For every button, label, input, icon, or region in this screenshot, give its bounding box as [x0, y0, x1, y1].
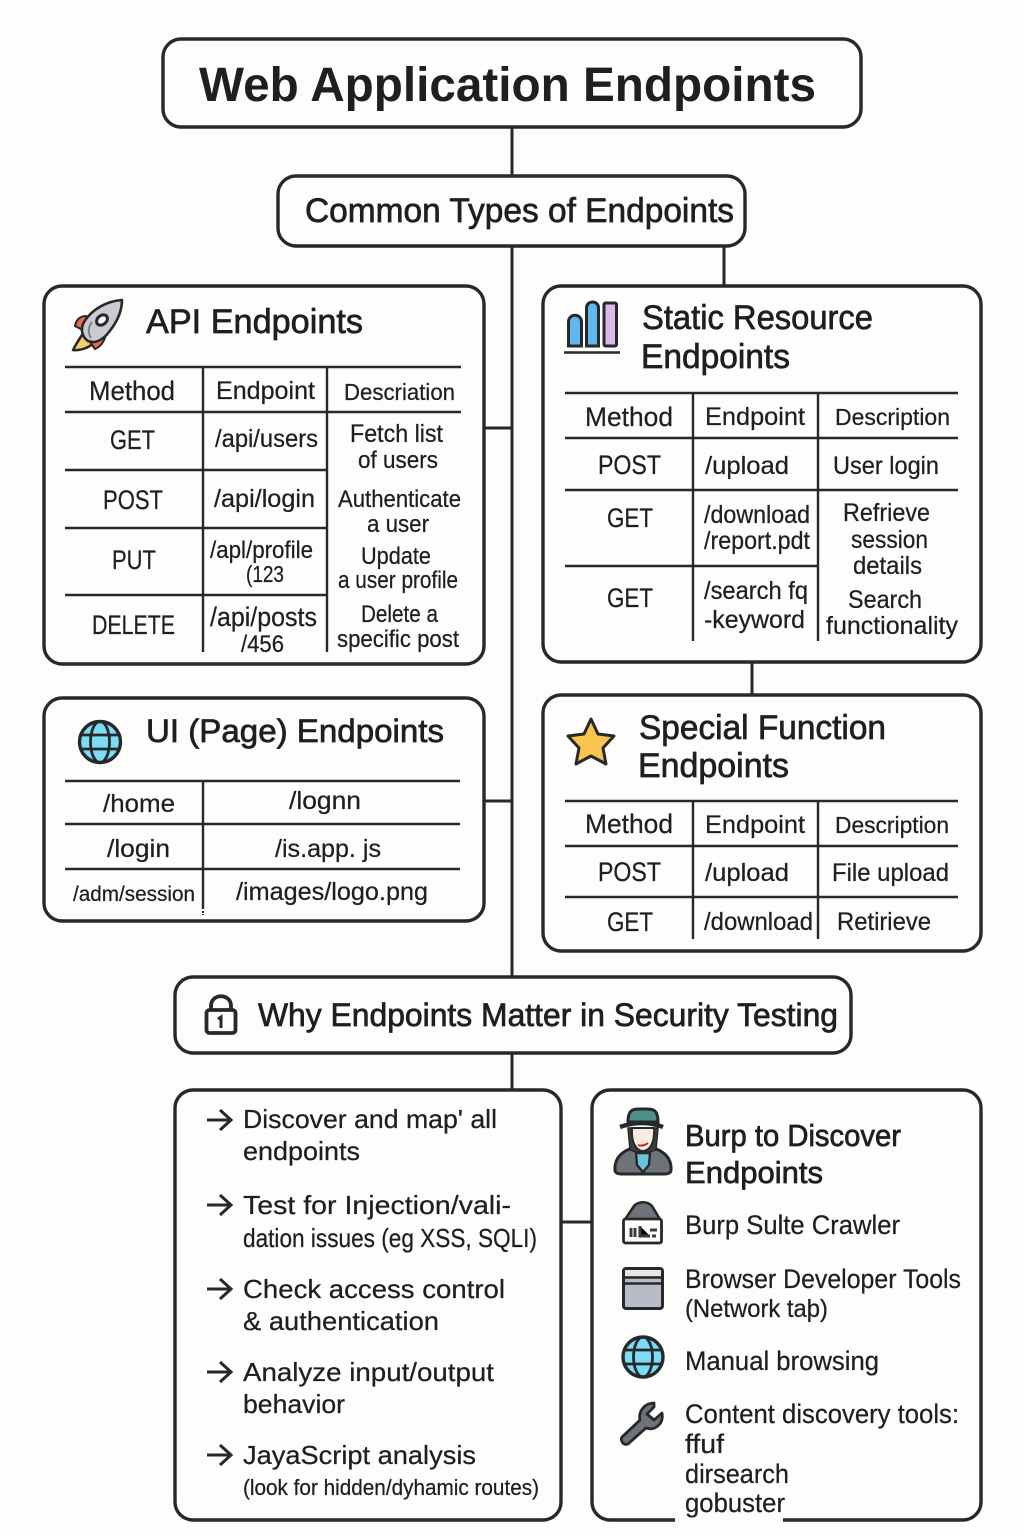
text: checklist items: dation issues (eg XSS, SQLI)	[243, 1223, 537, 1253]
text: API table: Method	[89, 376, 175, 406]
text: API table: /apl/profile	[210, 537, 313, 564]
text: special table: Endpoint	[705, 811, 805, 839]
text: API table: DELETE	[92, 610, 175, 640]
icon: star	[568, 719, 614, 764]
panel: API endpoints	[44, 286, 484, 664]
text: static table: details	[853, 552, 922, 580]
text: static table: /search fq	[704, 577, 808, 605]
text: API table	[89, 376, 461, 658]
text: API table: Endpoint	[216, 377, 315, 405]
panel: burp to discover endpoints: Browser Developer Tools	[685, 1264, 961, 1294]
text: API table: (123	[246, 561, 284, 587]
text: checklist items: Test for Injection/vali-	[243, 1190, 511, 1220]
text: API table: PUT	[112, 545, 156, 575]
text: UI table: /lognn	[289, 787, 361, 815]
text: API table: GET	[110, 425, 155, 455]
heading: common types of endpoints	[278, 176, 745, 246]
panel: burp to discover endpoints: Burp Sulte Crawler	[685, 1210, 900, 1240]
text: API table: a user profile	[338, 567, 458, 594]
text: checklist items: endpoints	[243, 1136, 360, 1166]
title: Web Application Endpoints	[199, 59, 816, 112]
text: API table: Fetch list	[350, 420, 443, 448]
text: checklist items: Analyze input/output	[243, 1357, 495, 1387]
icon: rocket	[73, 300, 122, 350]
panel: API endpoints: API Endpoints	[146, 303, 363, 341]
text: static table: POST	[598, 450, 661, 480]
panel: burp to discover endpoints: Content discovery tools:	[685, 1399, 959, 1429]
text: special table: /upload	[705, 859, 789, 887]
panel: static resource endpoints	[543, 286, 981, 662]
panel: UI page endpoints	[44, 698, 484, 921]
heading: why endpoints matter	[175, 977, 851, 1053]
panel: special function endpoints: Endpoints	[638, 747, 789, 785]
heading: why endpoints matter: Why Endpoints Matter in Security Testing	[258, 997, 838, 1033]
text: special table: File upload	[832, 859, 949, 887]
text: static table: User login	[833, 452, 939, 480]
text: special table: POST	[598, 857, 661, 887]
text: UI table	[73, 787, 428, 906]
text: API table: /api/posts	[210, 602, 317, 632]
text: special table: GET	[607, 907, 653, 937]
text: static table: functionality	[826, 612, 958, 640]
text: UI table: /is.app. js	[275, 835, 381, 863]
text: checklist items: (look for hidden/dyhamic routes)	[243, 1475, 539, 1500]
panel: burp to discover endpoints	[592, 1090, 981, 1524]
text: API table: Descriation	[344, 379, 455, 405]
icon: wrench	[621, 1403, 662, 1444]
text: checklist items: behavior	[243, 1389, 345, 1419]
text: API table: /api/login	[214, 485, 315, 513]
text: API table: Authenticate	[338, 486, 461, 513]
text: special table: Retirieve	[837, 908, 931, 936]
panel: burp to discover endpoints: Manual browsing	[685, 1346, 879, 1376]
text: static table: GET	[607, 503, 653, 533]
text: checklist items: JayaScript analysis	[243, 1440, 476, 1470]
panel: burp to discover endpoints: dirsearch	[685, 1459, 789, 1489]
text: API table: Update	[361, 543, 431, 570]
text: static table: GET	[607, 583, 653, 613]
text: static table: session	[851, 526, 928, 554]
text: API table: a user	[367, 511, 429, 538]
text: static table: Search	[848, 586, 922, 614]
panel: burp to discover endpoints: gobuster	[685, 1488, 785, 1518]
text: static table: -keyword	[704, 606, 805, 634]
text: static table: /report.pdt	[704, 527, 810, 555]
icon: hacker with hat	[615, 1109, 671, 1174]
text: API table: of users	[358, 447, 438, 474]
panel: burp to discover endpoints: Burp to Discover	[685, 1118, 901, 1153]
panel: burp to discover endpoints: (Network taþ)	[685, 1295, 828, 1323]
text: UI table: /adm/session	[73, 883, 195, 906]
panel: burp to discover endpoints: ffuf	[685, 1429, 725, 1459]
text: UI table: /home	[103, 790, 175, 818]
text: static table: Description	[835, 404, 950, 430]
text: static table: Method	[585, 402, 673, 432]
text: static table: /download	[704, 501, 810, 529]
text: checklist items	[243, 1104, 539, 1500]
text: static table: Refrieve	[843, 499, 930, 527]
text: special table: Description	[835, 812, 949, 838]
panel: special function endpoints	[543, 695, 981, 951]
icon: bar chart	[564, 302, 620, 352]
text: API table: Delete a	[361, 601, 439, 628]
text: checklist items: Check access control	[243, 1274, 505, 1304]
icon: browser window	[624, 1268, 662, 1308]
panel: static resource endpoints: Endpoints	[641, 338, 790, 376]
text: static table: /upload	[705, 452, 789, 480]
text: API table: specific post	[337, 626, 459, 653]
icon: globe	[623, 1337, 663, 1377]
text: API table: /456	[241, 631, 284, 658]
text: API table: POST	[103, 485, 163, 515]
text: static table	[585, 402, 958, 640]
text: UI table: /images/logo.png	[236, 878, 428, 906]
icon: padlock	[206, 996, 236, 1033]
text: special table: /download	[704, 908, 813, 936]
panel: special function endpoints: Special Function	[639, 709, 886, 747]
text: static table: Endpoint	[705, 403, 805, 431]
panel: burp to discover endpoints: Endpoints	[685, 1155, 823, 1190]
arrows	[207, 1110, 231, 1465]
text: UI table: /login	[107, 835, 170, 863]
text: checklist items: Discover and map' all	[243, 1104, 497, 1134]
panel: UI page endpoints: UI (Page) Endpoints	[146, 713, 444, 749]
title	[163, 39, 861, 127]
text: API table: /api/users	[215, 425, 318, 453]
icon: globe	[80, 722, 120, 762]
text: special table	[585, 809, 949, 937]
panel: security testing checklist	[175, 1090, 561, 1520]
panel: static resource endpoints: Static Resource	[642, 299, 873, 337]
heading: common types of endpoints: Common Types of Endpoints	[305, 192, 734, 230]
text: checklist items: & authentication	[243, 1306, 439, 1336]
icon: burp crawler	[624, 1202, 662, 1243]
text: special table: Method	[585, 809, 673, 839]
